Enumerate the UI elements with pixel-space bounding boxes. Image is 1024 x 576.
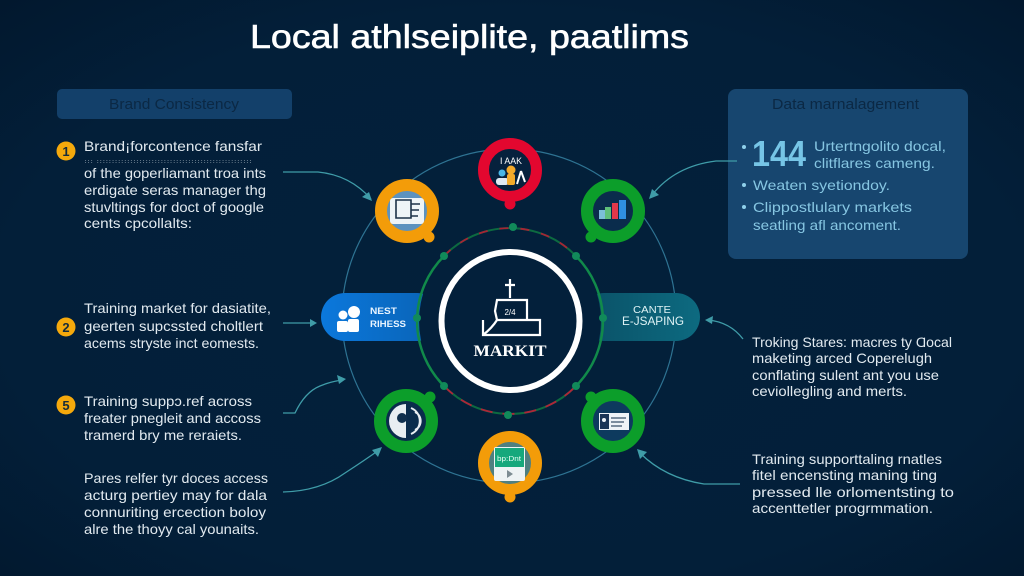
node: red people: [484, 144, 536, 210]
panel: brand consistency header: [57, 89, 292, 119]
badge: number 1: [56, 142, 76, 160]
text block: tracking: ceviollegling and merts.: [752, 383, 907, 399]
text block: pares: connuriting ercection boloy: [84, 504, 266, 520]
text block: brand consistency: ːːː ːːːːːːːːːːːːːːːːːːːːːːːːːːːːːːːːːːːːːːːːːːːːːːːːːːː: [84, 159, 252, 165]
text block: pares: acturg pertiey may for dala: [84, 487, 267, 503]
text block: training market: Training market for dasiatite,: [84, 300, 271, 316]
text block: training support: freater pnegleit and accoss: [84, 410, 261, 426]
panel: data management: [728, 89, 968, 259]
title: Local athlseiplite, paatlims: [250, 18, 689, 55]
node: green id card: [586, 392, 639, 447]
badge: number 2: [56, 318, 76, 336]
panel: data management: 144: [752, 133, 806, 174]
center hub: [413, 223, 607, 419]
text block: training support: Training suppɔ.ref across: [84, 393, 252, 409]
text block: brand consistency: cents cpcollalts:: [84, 215, 192, 231]
text block: tracking: [752, 334, 952, 399]
text block: training support: [84, 393, 261, 443]
panel: data management: Data marnalagement: [772, 97, 919, 113]
icon: ship: 2/4: [504, 308, 516, 317]
badge: number 3: [56, 396, 76, 414]
pill: next business: RIHESS: [370, 319, 406, 330]
text block: pares: Pares relfer tyr doces access: [84, 470, 268, 486]
node: green chart: [586, 185, 639, 242]
text block: brand consistency: [84, 138, 266, 231]
node: orange video: [484, 436, 536, 502]
text block: training support right: accenttetler progrmmation.: [752, 500, 933, 516]
arrow: tracking to teal pill: [705, 316, 743, 339]
arrow: training to blue pill: [283, 319, 317, 327]
badge: number 1: 1: [62, 144, 70, 159]
panel: data management: seatling afl ancoment.: [753, 217, 901, 233]
arrow: support to left orbit: [283, 375, 346, 413]
arrow: brand to orange node: [283, 172, 372, 201]
text block: training support: tramerd bry me reraiets.: [84, 427, 242, 443]
text block: brand consistency: erdigate seras manager thg: [84, 182, 266, 198]
pill: next business: NEST: [370, 306, 397, 317]
text block: brand consistency: stuvltings for doct of google: [84, 199, 264, 215]
text block: pares: [84, 470, 268, 537]
icon: ship: [483, 279, 540, 335]
text block: training market: geerten supcssted choltlert: [84, 318, 263, 334]
arrow: pares to green node: [283, 447, 382, 492]
node: red people: I AAK: [500, 156, 522, 166]
arrow: data panel to green node: [649, 161, 737, 199]
green ring with nodes: [413, 223, 607, 419]
text block: pares: alre the thoyy cal younaits.: [84, 521, 259, 537]
text block: tracking: maketing arced Coperelugh: [752, 350, 932, 366]
text block: training market: [84, 300, 271, 351]
panel: brand consistency header: Brand Consistency: [109, 97, 240, 113]
pill: content training: CANTE: [633, 305, 671, 316]
white ring: [442, 252, 580, 390]
text block: tracking: conflating sulent ant you use: [752, 367, 939, 383]
node: orange document: [381, 185, 434, 242]
text block: training support right: fitel encensting maning ting: [752, 467, 937, 483]
badge: number 3: 5: [62, 398, 70, 413]
text block: brand consistency: of the ɡoperliamant troa ints: [84, 165, 266, 181]
panel: data management: Urtertngolito docal,: [814, 138, 946, 154]
arrow: training to lower green node: [637, 449, 740, 484]
pill: next business: [321, 293, 441, 341]
label: market: MARKIT: [474, 343, 547, 360]
text block: training market: acems stryste inct eomests.: [84, 335, 259, 351]
panel: data management: Clippostlulary markets: [753, 199, 912, 215]
text block: training support right: Training supporttaling rnatles: [752, 451, 942, 467]
text block: training support right: [752, 451, 954, 516]
node: orange video: bp:Dnt: [497, 454, 522, 463]
outer orbit ring: [342, 149, 676, 483]
node: green support: [380, 392, 436, 447]
panel: data management: Weaten syetiondoy.: [753, 177, 890, 193]
pill: content training: E-JSAPING: [622, 314, 684, 328]
panel: data management: clitflares cameng.: [814, 155, 935, 171]
pill: content training: [580, 293, 700, 341]
text block: training support right: pressed lle orlomentsting to: [752, 484, 954, 500]
text block: tracking: Troking Stares: macres ty Ɑocal: [752, 334, 952, 350]
badge: number 2: 2: [62, 320, 70, 335]
text block: brand consistency: Brand¡forcontence fansfar: [84, 138, 262, 154]
